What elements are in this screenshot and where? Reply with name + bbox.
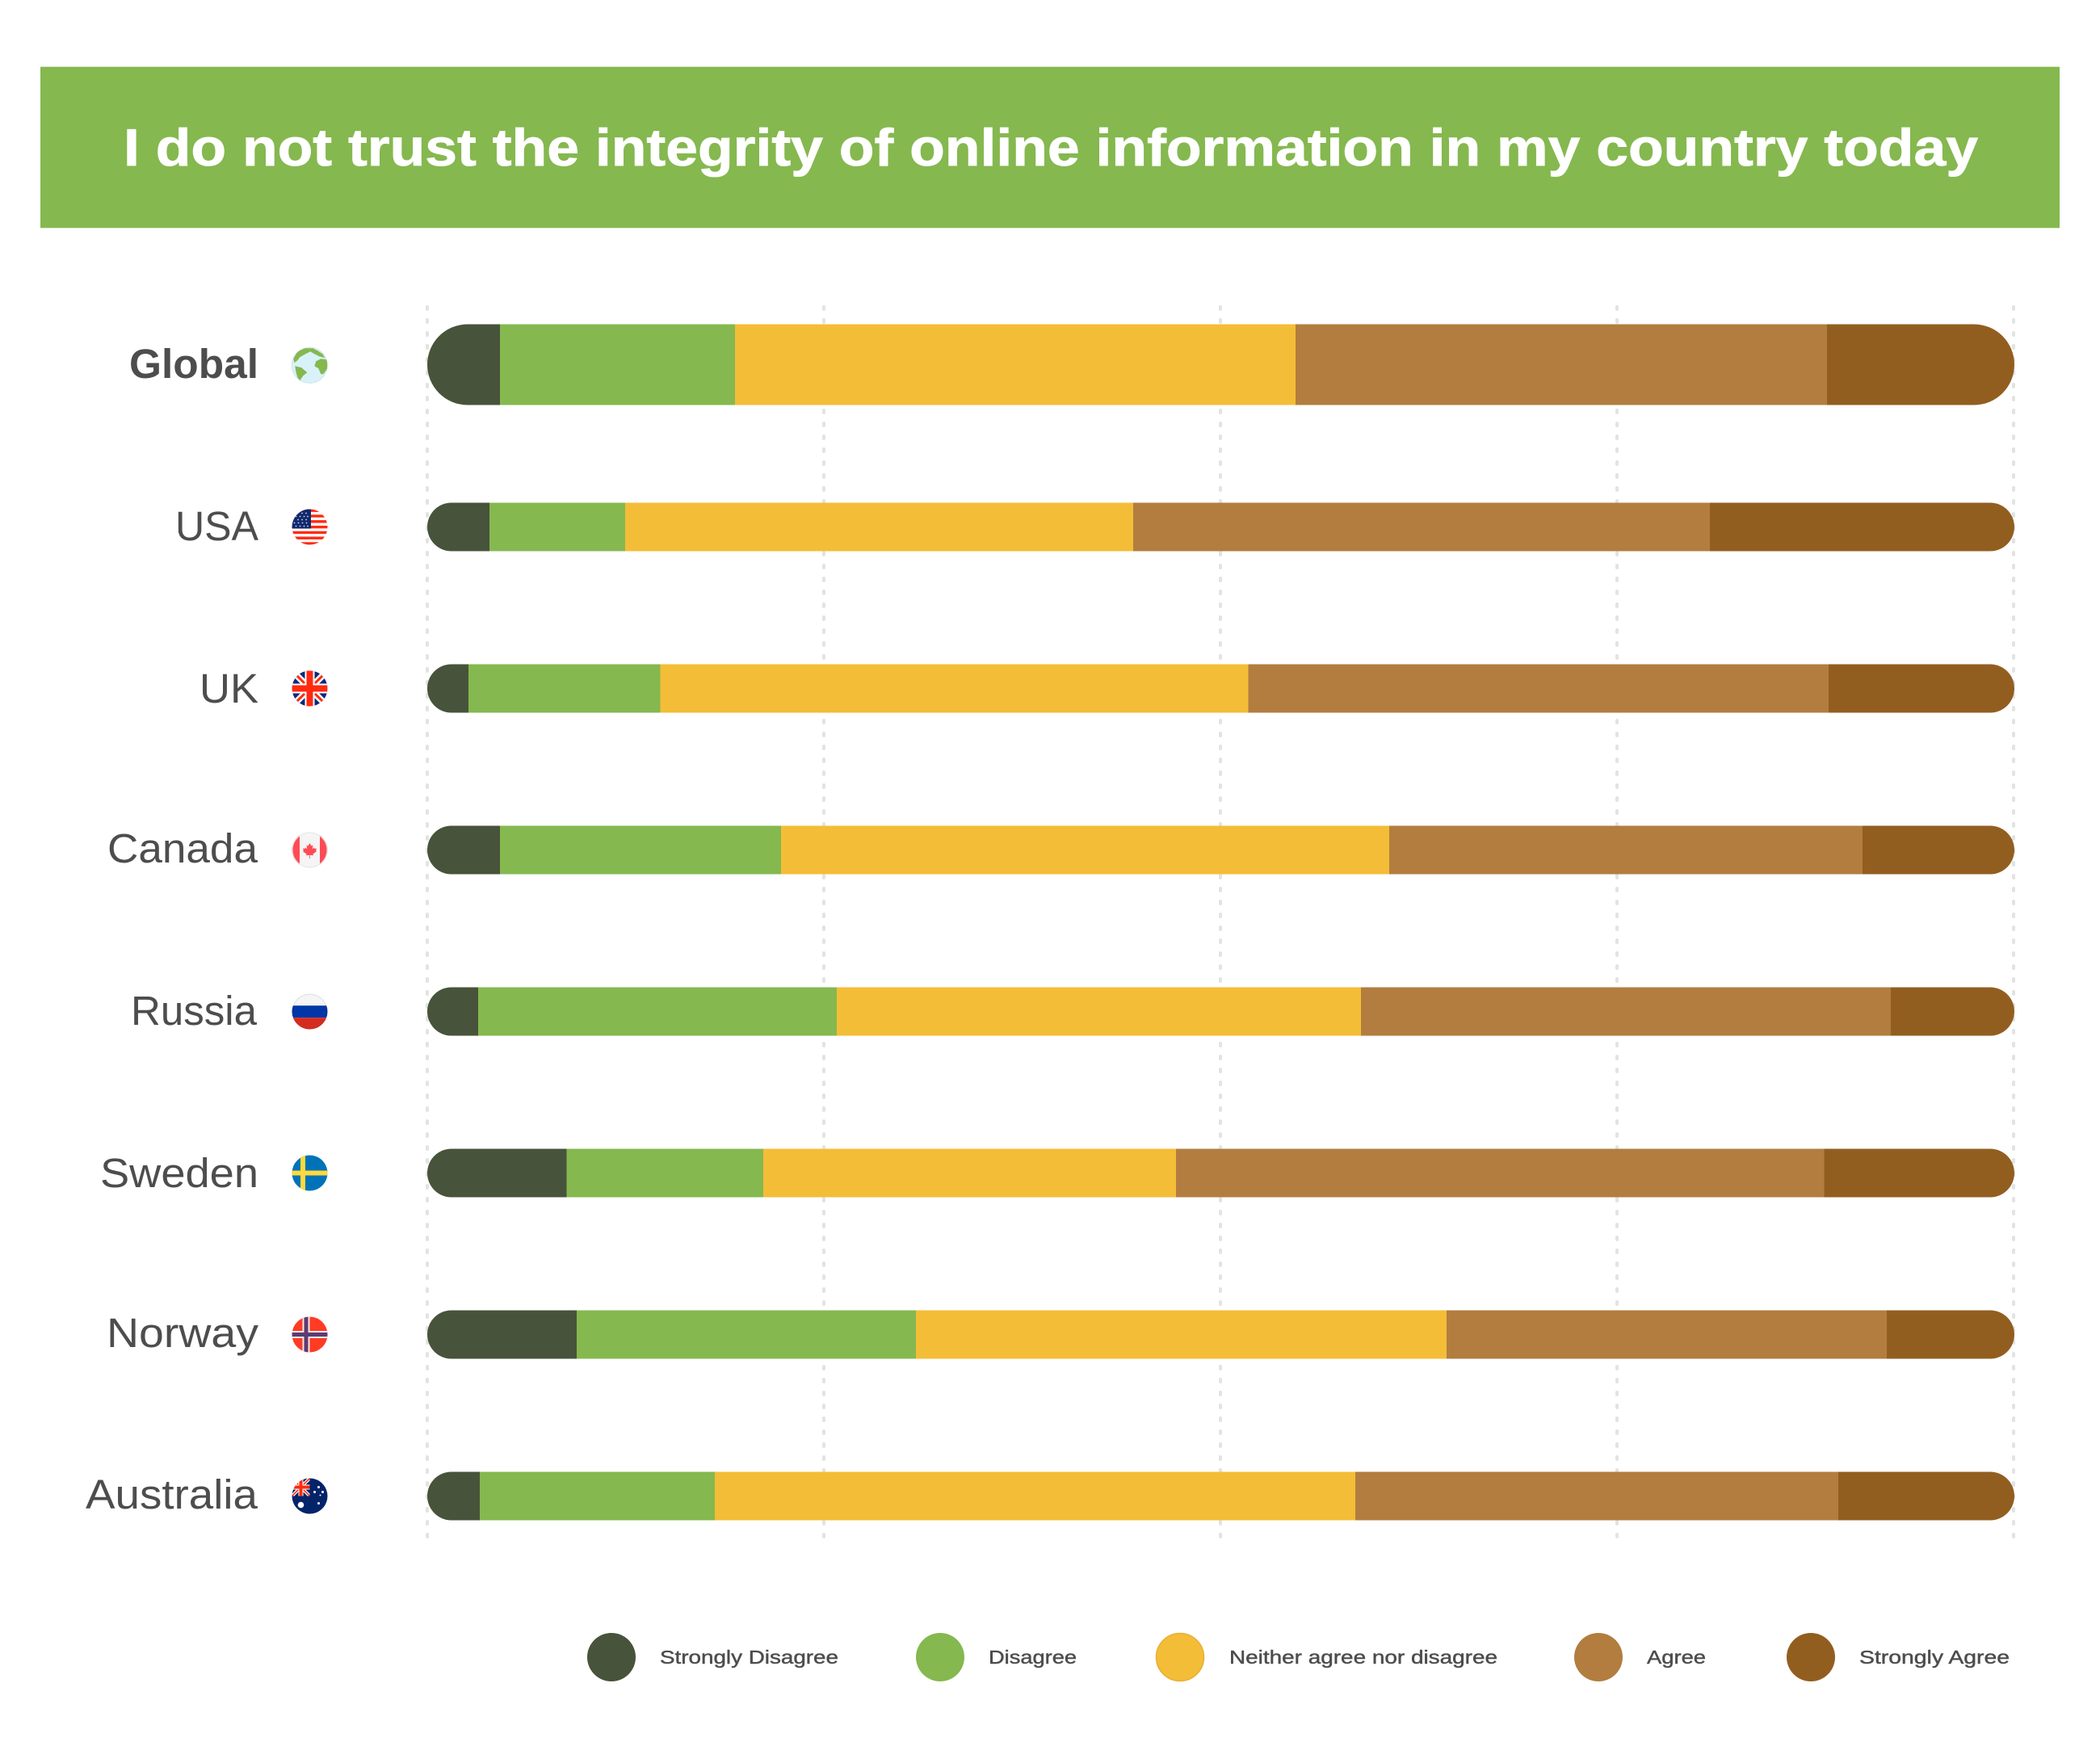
segment: strongly agree: [1829, 664, 2014, 712]
segment: strongly disagree: [427, 1471, 480, 1520]
icon: Canada flag: [292, 832, 328, 867]
icon: globe: [292, 347, 327, 383]
row: Sweden: [100, 1148, 2014, 1197]
label: Sweden: Sweden: [100, 1150, 258, 1196]
row: Canada: [107, 825, 2014, 874]
segment: strongly disagree: [427, 325, 500, 405]
label: Global: Global: [129, 341, 258, 387]
segment: strongly disagree: [427, 825, 500, 874]
row: Norway: [107, 1310, 2014, 1358]
segment: strongly disagree: [427, 1148, 567, 1197]
segment: disagree: [567, 1148, 763, 1197]
legend item: Strongly Agree: [1787, 1633, 2010, 1681]
stacked bar: Russia: [427, 987, 2014, 1035]
title text: I do not trust the integrity of online information in my country today: [124, 118, 1978, 177]
row: USA: [175, 502, 2014, 551]
segment: neither: [715, 1471, 1355, 1520]
legend item: Agree: [1574, 1633, 1706, 1681]
segment: disagree: [500, 825, 781, 874]
segment: disagree: [489, 502, 625, 551]
segment: agree: [1361, 987, 1891, 1035]
label: Australia: Australia: [86, 1471, 258, 1517]
title banner: [40, 67, 2060, 228]
label: Russia: Russia: [131, 988, 258, 1034]
segment: neither: [837, 987, 1361, 1035]
segment: agree: [1296, 325, 1827, 405]
segment: strongly agree: [1824, 1148, 2014, 1197]
segment: agree: [1133, 502, 1710, 551]
segment: agree: [1355, 1471, 1838, 1520]
segment: strongly agree: [1891, 987, 2014, 1035]
segment: neither: [763, 1148, 1176, 1197]
legend: [587, 1633, 2010, 1681]
segment: neither: [916, 1310, 1447, 1358]
segment: neither: [781, 825, 1389, 874]
stacked bar: USA: [427, 502, 2014, 551]
segment: neither: [735, 325, 1296, 405]
legend item: Agree: Agree: [1647, 1647, 1706, 1668]
segment: strongly disagree: [427, 987, 478, 1035]
segment: disagree: [500, 325, 735, 405]
segment: disagree: [478, 987, 837, 1035]
segment: strongly agree: [1887, 1310, 2014, 1358]
segment: agree: [1176, 1148, 1824, 1197]
segment: strongly agree: [1710, 502, 2014, 551]
label: Norway: Norway: [107, 1310, 259, 1356]
segment: agree: [1389, 825, 1863, 874]
segment: strongly disagree: [427, 664, 468, 712]
segment: strongly agree: [1838, 1471, 2014, 1520]
legend item: Neither agree nor disagree: [1157, 1633, 1497, 1681]
segment: strongly agree: [1827, 325, 2014, 405]
stacked bar: Global: [427, 325, 2014, 405]
segment: agree: [1447, 1310, 1887, 1358]
segment: strongly disagree: [427, 1310, 577, 1358]
stacked bar: Australia: [427, 1471, 2014, 1520]
segment: agree: [1249, 664, 1829, 712]
stacked bar: Norway: [427, 1310, 2014, 1358]
row: Australia: [86, 1471, 2014, 1520]
legend item: Strongly Disagree: Strongly Disagree: [660, 1647, 838, 1668]
icon: Sweden flag: [292, 1155, 328, 1190]
icon: USA flag: [292, 509, 328, 545]
segment: disagree: [577, 1310, 916, 1358]
segment: strongly disagree: [427, 502, 489, 551]
icon: Australia flag: [292, 1478, 328, 1513]
label: UK: UK: [200, 665, 258, 711]
legend item: Disagree: Disagree: [989, 1647, 1077, 1668]
label: USA: USA: [175, 503, 258, 549]
icon: Norway flag: [292, 1316, 328, 1352]
stacked bar: Sweden: [427, 1148, 2014, 1197]
stacked bar: Canada: [427, 825, 2014, 874]
stacked bar: UK: [427, 664, 2014, 712]
segment: disagree: [468, 664, 661, 712]
legend item: Strongly Disagree: [587, 1633, 838, 1681]
label: Canada: Canada: [107, 825, 258, 871]
icon: Russia flag: [292, 993, 328, 1029]
legend item: Neither agree nor disagree: Neither agree nor disagree: [1229, 1647, 1497, 1668]
row: Russia: [131, 987, 2014, 1035]
row: Global: [129, 325, 2014, 405]
legend item: Strongly Agree: Strongly Agree: [1859, 1647, 2010, 1668]
segment: disagree: [480, 1471, 715, 1520]
segment: neither: [661, 664, 1249, 712]
icon: UK flag: [292, 670, 328, 706]
segment: strongly agree: [1863, 825, 2014, 874]
row: UK: [200, 664, 2014, 712]
legend item: Disagree: [916, 1633, 1077, 1681]
segment: neither: [625, 502, 1133, 551]
